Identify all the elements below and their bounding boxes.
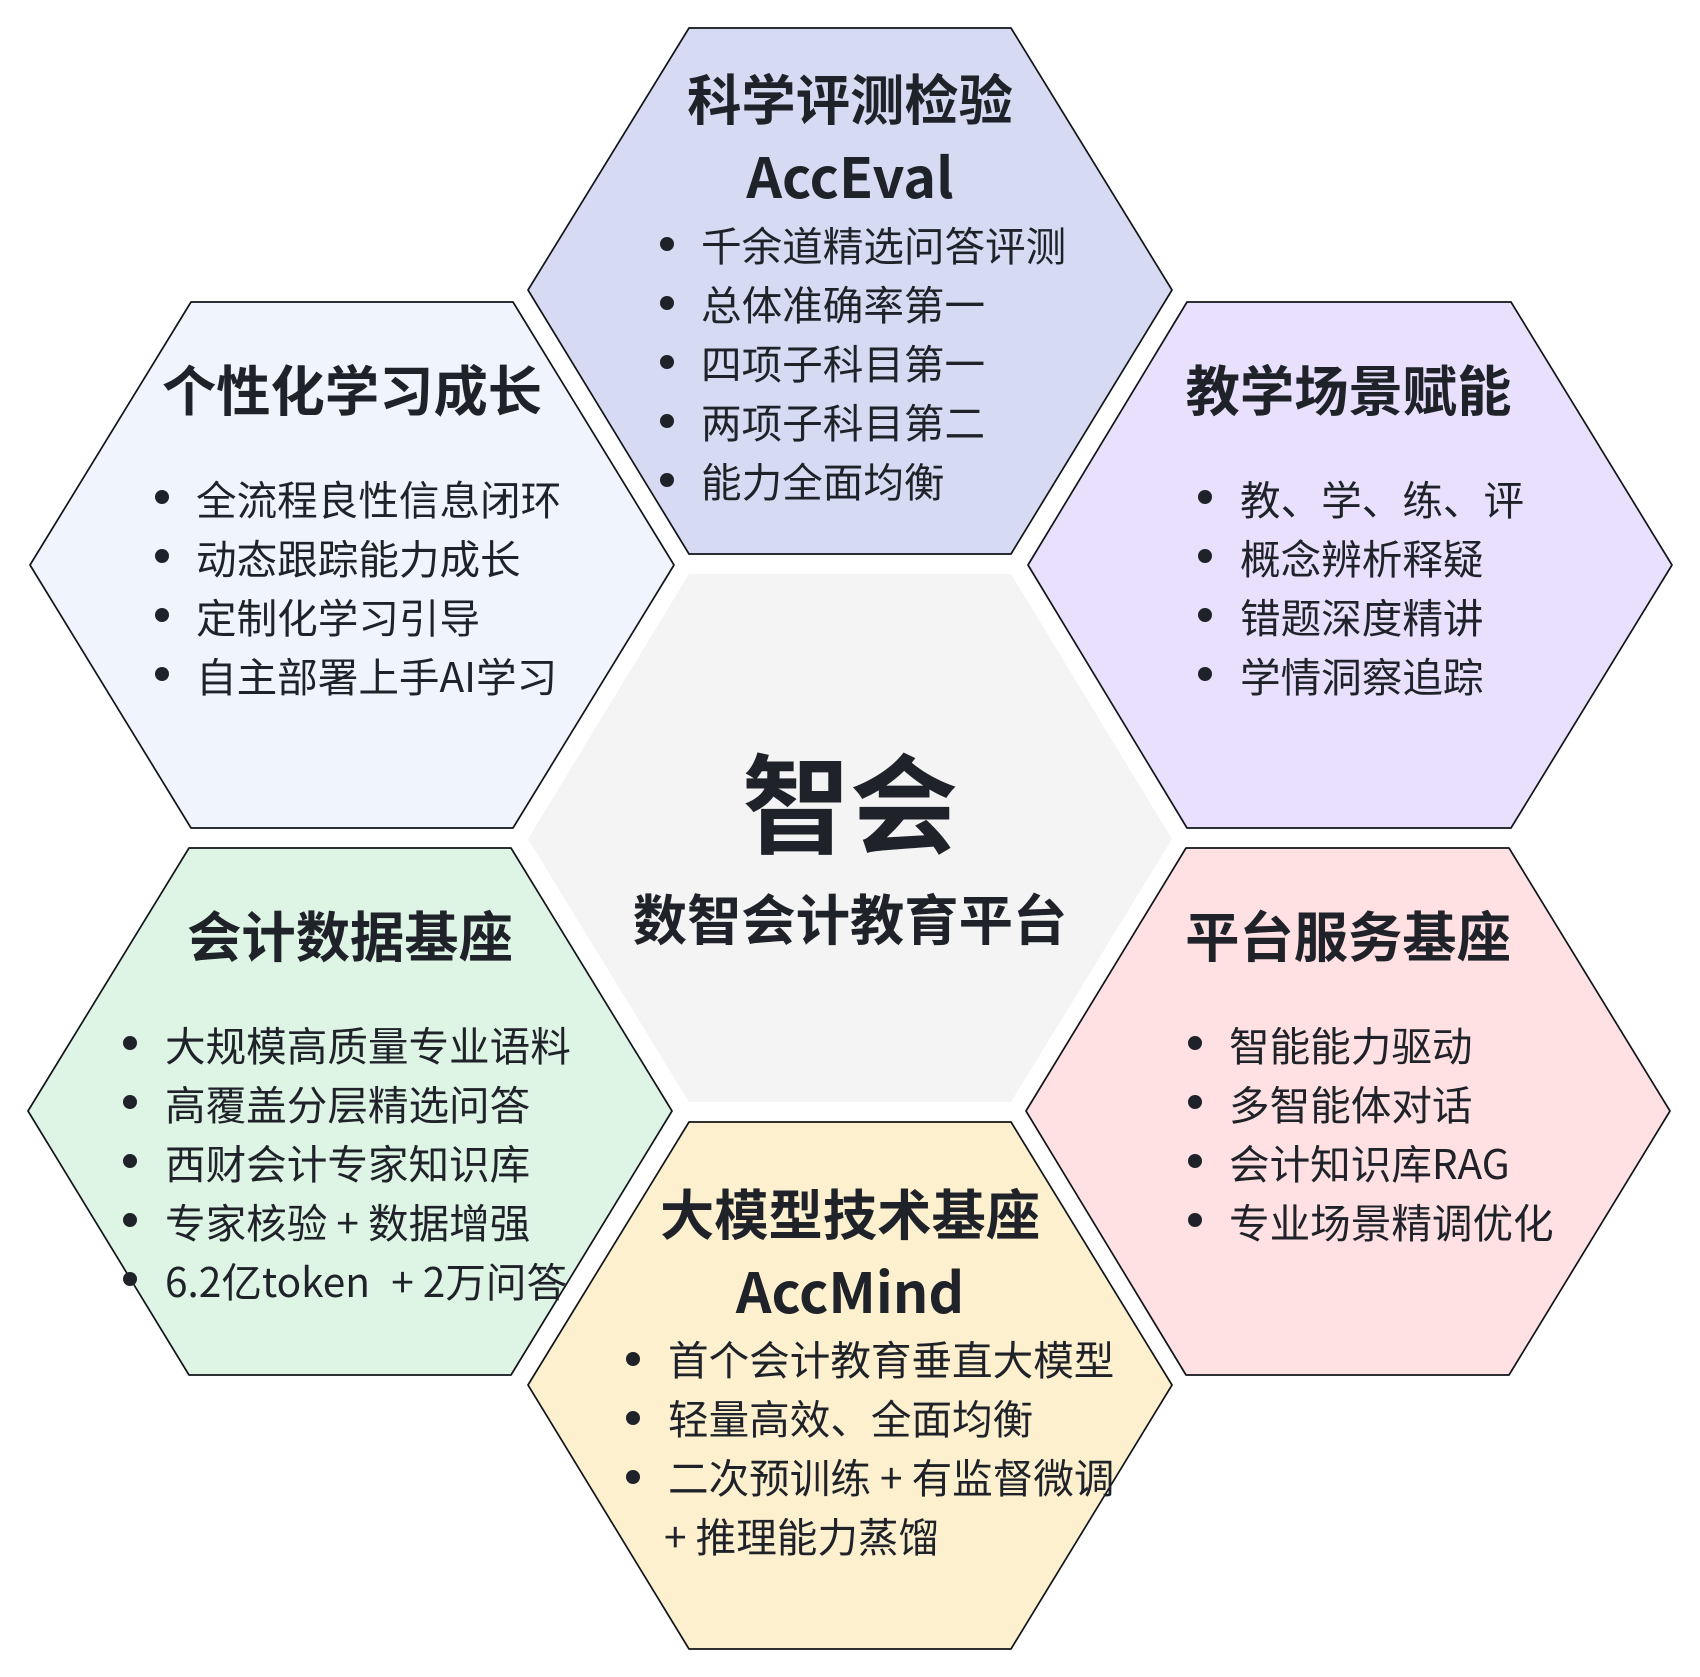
bullet list: 总体准确率第一	[701, 273, 985, 332]
heading: 科学评测检验	[687, 57, 1013, 136]
panel: teaching scenarios	[1028, 302, 1672, 828]
bullet list: 二次预训练 + 有监督微调	[668, 1446, 1114, 1505]
center title: 智会	[742, 721, 958, 877]
bullet list: 6.2亿token + 2万问答	[165, 1250, 567, 1309]
bullet list: 学情洞察追踪	[1240, 645, 1483, 704]
bullet list: 西财会计专家知识库	[165, 1132, 530, 1191]
bullet list	[1188, 1014, 1554, 1250]
bullet list: 高覆盖分层精选问答	[165, 1073, 530, 1132]
bullet list: 首个会计教育垂直大模型	[668, 1328, 1114, 1387]
bullet list: 四项子科目第一	[701, 332, 985, 391]
panel: personalized learning growth	[30, 302, 674, 828]
heading: 会计数据基座	[187, 894, 513, 973]
panel: scientific evaluation AccEval	[528, 28, 1172, 554]
bullet list: 动态跟踪能力成长	[196, 527, 521, 586]
bullet list: 全流程良性信息闭环	[196, 468, 561, 527]
bullet list: 千余道精选问答评测	[701, 214, 1066, 273]
bullet list	[123, 1014, 571, 1309]
bullet list: + 推理能力蒸馏	[664, 1505, 939, 1564]
bullet list: 大规模高质量专业语料	[165, 1014, 571, 1073]
panel: center platform	[528, 574, 1172, 1102]
bullet list: 轻量高效、全面均衡	[668, 1387, 1033, 1446]
bullet list: 自主部署上手AI学习	[196, 645, 557, 704]
heading: 教学场景赋能	[1186, 348, 1511, 427]
heading: 大模型技术基座	[660, 1172, 1040, 1251]
bullet list: 多智能体对话	[1229, 1073, 1472, 1132]
bullet list: 智能能力驱动	[1229, 1014, 1472, 1073]
bullet list: 错题深度精讲	[1240, 586, 1483, 645]
panel: large model foundation AccMind	[528, 1122, 1172, 1649]
heading: 平台服务基座	[1185, 894, 1511, 973]
bullet list: 两项子科目第二	[701, 391, 985, 450]
panel: accounting data foundation	[28, 848, 672, 1375]
bullet list: 专家核验 + 数据增强	[165, 1191, 530, 1250]
heading: AccMind: AccMind	[735, 1250, 964, 1330]
bullet list	[626, 1328, 1114, 1564]
panel: platform service foundation	[1026, 848, 1670, 1375]
center subtitle: 数智会计教育平台	[633, 877, 1067, 956]
bullet list	[155, 468, 561, 704]
heading: AccEval: AccEval	[745, 135, 954, 215]
heading: 个性化学习成长	[162, 348, 542, 427]
bullet list: 专业场景精调优化	[1229, 1191, 1554, 1250]
bullet list	[1198, 468, 1524, 704]
bullet list: 能力全面均衡	[701, 450, 944, 509]
bullet list: 定制化学习引导	[196, 586, 480, 645]
bullet list: 会计知识库RAG	[1229, 1132, 1510, 1191]
bullet list: 教、学、练、评	[1240, 468, 1524, 527]
bullet list	[660, 214, 1066, 509]
bullet list: 概念辨析释疑	[1240, 527, 1483, 586]
